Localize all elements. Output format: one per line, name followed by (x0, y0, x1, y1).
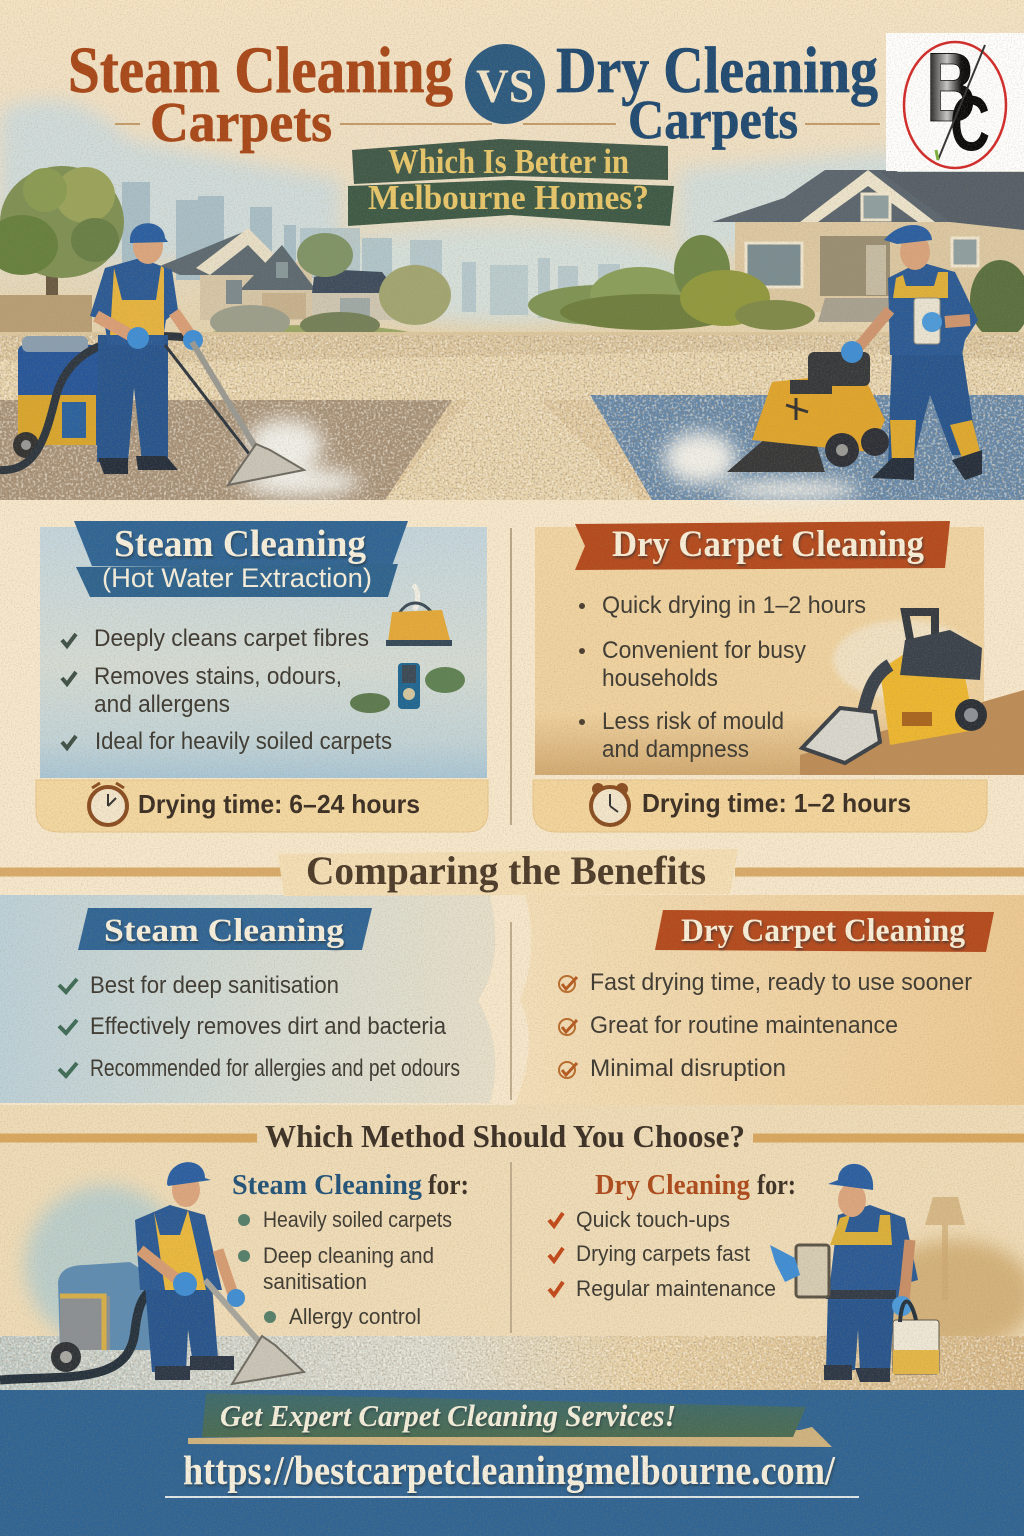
heading: Which Method Should You Choose? (265, 1118, 745, 1154)
arms (140, 1250, 235, 1300)
shrubs right (560, 260, 1024, 340)
icon: dry cleaning machine (802, 612, 987, 763)
heading ribbon: (Hot Water Extraction) (102, 563, 372, 593)
legs (145, 1285, 218, 1372)
steam list: Deep cleaning and (263, 1243, 434, 1268)
boots (98, 456, 178, 474)
steam wand (205, 1280, 304, 1384)
glove left (770, 1245, 800, 1282)
drying time footer (36, 780, 488, 832)
hero illustration (0, 78, 1024, 504)
subtitle banner (348, 139, 674, 226)
yellow straps (893, 272, 948, 298)
dry benefits: Minimal disruption (590, 1055, 786, 1082)
gloves (127, 327, 149, 349)
shirt (135, 1205, 222, 1290)
steam clouds (240, 419, 860, 500)
steam benefits: Recommended for allergies and pet odours (90, 1055, 460, 1082)
icon: spray pump and leaves (350, 663, 465, 713)
icon: clock (89, 783, 127, 825)
title: steam cleaning carpets: Carpets (150, 92, 332, 154)
section: comparing the benefits (0, 848, 1024, 1105)
underline (165, 1496, 859, 1498)
glove right (892, 1296, 912, 1316)
shirt (828, 1205, 918, 1300)
call to action text: Get Expert Carpet Cleaning Services! (220, 1398, 676, 1433)
head (133, 228, 163, 264)
worker lower left (135, 1162, 245, 1380)
section stripes (0, 868, 1024, 876)
dry list: for: (757, 1170, 796, 1201)
dry benefits (559, 910, 994, 1082)
shirt (888, 262, 978, 355)
boots (155, 1356, 234, 1380)
overalls legs (888, 350, 978, 465)
head (838, 1183, 866, 1217)
title: dry cleaning carpets: Dry Cleaning (556, 34, 878, 107)
blue carpet right (590, 395, 1024, 500)
centre carpet strip (0, 350, 1024, 500)
cap (884, 225, 932, 244)
bullet list: Quick drying in 1–2 hours (602, 592, 866, 619)
fence (0, 295, 92, 335)
panel background (535, 527, 984, 775)
ribbon base (188, 1427, 832, 1447)
benefits background left (0, 895, 495, 1103)
steam benefits: Steam Cleaning (104, 913, 345, 949)
arm (904, 1240, 910, 1300)
bottle in hand (796, 1245, 829, 1297)
checklist: Deeply cleans carpet fibres (94, 625, 369, 652)
dry list: Quick touch-ups (576, 1207, 730, 1232)
machine: lower steam extractor (0, 1262, 185, 1380)
yellow boots (890, 420, 980, 462)
bullet list: and dampness (602, 736, 749, 763)
subtitle banner: Which Is Better in (388, 142, 629, 181)
logo: C (950, 79, 990, 167)
driveway ground (0, 332, 1024, 500)
footer background (0, 1390, 1024, 1536)
steam list: Heavily soiled carpets (263, 1207, 452, 1232)
steam wand (165, 342, 304, 485)
gloves (173, 1272, 197, 1296)
head (172, 1173, 200, 1207)
panel: dry carpet cleaning intro (533, 521, 1024, 832)
section background (0, 1105, 1024, 1390)
vs badge (465, 44, 545, 124)
dry benefits: Fast drying time, ready to use sooner (590, 969, 972, 996)
steam benefits: Effectively removes dirt and bacteria (90, 1013, 446, 1040)
machine: steam extractor (13, 336, 102, 458)
brown carpet left (0, 400, 452, 500)
shirt (90, 258, 178, 345)
checklist: Removes stains, odours, (94, 663, 342, 690)
heading: Comparing the Benefits (306, 848, 706, 893)
title: dry cleaning carpets: Carpets (628, 89, 798, 150)
stripes (0, 1134, 1024, 1142)
benefits background right (515, 895, 1024, 1105)
worker lower right (770, 1164, 939, 1382)
left arm (858, 310, 890, 348)
dry list (549, 1170, 796, 1301)
tree left (0, 166, 124, 300)
logo: B (926, 32, 976, 142)
checklist: and allergens (94, 691, 230, 718)
divider (510, 1162, 512, 1333)
apron (154, 1210, 206, 1290)
distant clouds and hills (0, 100, 1024, 323)
bottle (914, 298, 940, 344)
tan wash right (875, 1240, 1024, 1350)
legs (826, 1290, 895, 1372)
dry benefits: Great for routine maintenance (590, 1012, 898, 1039)
section: which method (0, 1105, 1024, 1390)
carpet strip (800, 690, 1024, 775)
panel background (40, 527, 487, 778)
steam list: Allergy control (289, 1304, 421, 1329)
boots (824, 1365, 890, 1382)
dry list: Drying carpets fast (576, 1241, 751, 1266)
trousers (97, 335, 168, 462)
bullet list (579, 592, 866, 763)
logo (886, 32, 1024, 171)
checklist: Ideal for heavily soiled carpets (95, 728, 392, 755)
yellow straps (830, 1215, 892, 1245)
steam benefits (59, 908, 460, 1082)
icon: clock (591, 783, 629, 825)
heading ribbon: Steam Cleaning (114, 523, 366, 565)
steam list: Steam Cleaning (232, 1170, 422, 1201)
gloves (841, 341, 863, 363)
steam benefits: Best for deep sanitisation (90, 972, 339, 999)
cap (828, 1164, 873, 1190)
carpet floor (0, 1336, 1024, 1390)
boots (872, 450, 982, 480)
head (900, 234, 930, 270)
drying time footer: Drying time: 6–24 hours (138, 789, 420, 819)
hose (0, 336, 192, 470)
title: dry cleaning carpets (556, 34, 878, 150)
panel: steam cleaning intro (36, 521, 488, 832)
worker left (90, 223, 203, 474)
left house (160, 228, 398, 320)
icon: cleaning sponge bucket (386, 585, 452, 646)
dry list: Dry Cleaning (595, 1170, 750, 1201)
sky (0, 0, 1024, 345)
arms (96, 312, 192, 338)
website url: https://bestcarpetcleaningmelbourne.com/ (183, 1447, 836, 1493)
steam list (232, 1170, 469, 1329)
dry list: Regular maintenance (576, 1276, 776, 1301)
heading ribbon (74, 521, 408, 597)
heading ribbon: Dry Carpet Cleaning (612, 524, 924, 565)
title: steam cleaning carpets: Steam Cleaning (68, 34, 453, 107)
bullet list: households (602, 665, 718, 692)
lawn and shrubs left (205, 305, 415, 347)
cleaning case (893, 1320, 939, 1374)
footer call to action (0, 1390, 1024, 1536)
right house (712, 170, 1024, 322)
icon: faint lamp (925, 1197, 965, 1300)
skyline (122, 182, 700, 318)
bullet list: Less risk of mould (602, 708, 784, 735)
floor texture (0, 1336, 1024, 1390)
dry benefits: Dry Carpet Cleaning (681, 913, 965, 949)
drying time footer (533, 780, 987, 832)
bullet list: Convenient for busy (602, 637, 807, 664)
apron (110, 266, 164, 335)
right arm (945, 320, 970, 322)
machine: dry cleaner (727, 352, 889, 472)
worker right (841, 225, 982, 480)
ribbon (202, 1393, 806, 1437)
trees mid (297, 233, 730, 325)
blue wash left (25, 1185, 185, 1345)
vs badge: VS (476, 60, 534, 113)
cap (167, 1162, 211, 1186)
steam list: sanitisation (263, 1269, 367, 1294)
belt (826, 1290, 896, 1299)
cap (130, 223, 168, 243)
steam list: for: (428, 1170, 469, 1201)
centre divider (510, 528, 512, 825)
carpet texture (0, 335, 1024, 500)
drying time footer: Drying time: 1–2 hours (642, 788, 911, 818)
subtitle banner: Melbourne Homes? (368, 178, 649, 217)
title: steam cleaning carpets (68, 34, 453, 154)
checklist (62, 625, 392, 755)
